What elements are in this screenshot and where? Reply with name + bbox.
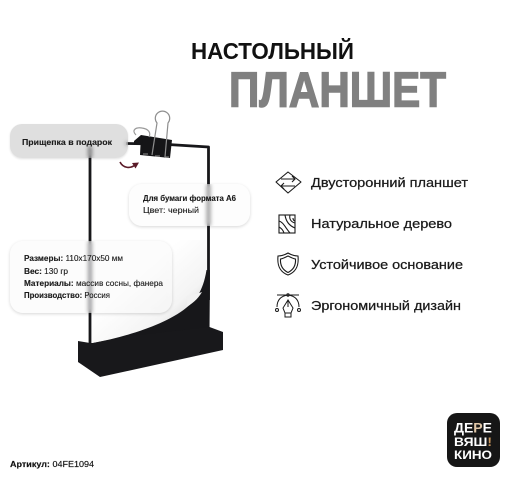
title: настольный: НАСТОЛЬНЫЙ	[191, 37, 354, 64]
panel: paper format: Для бумаги формата А6	[143, 194, 237, 203]
panel: specifications	[10, 241, 172, 313]
article number: Артикул: 04FE1094	[10, 459, 94, 469]
title: планшет: ПЛАНШЕТ	[229, 62, 446, 118]
feature text: устойчивое основание: Устойчивое основание	[311, 257, 463, 272]
panel: specifications: Размеры: 110x170x50 мм	[24, 254, 123, 263]
paper corner	[185, 292, 202, 308]
panel: clip gift: Прищепка в подарок	[22, 138, 113, 147]
logo: КИНО	[454, 450, 492, 462]
logo: ДЕРЕ	[454, 420, 492, 436]
arrow	[120, 162, 139, 168]
panel: specifications: Вес: 130 гр	[24, 267, 69, 276]
panel: paper format: Цвет: черный	[143, 206, 199, 215]
feature text: натуральное дерево: Натуральное дерево	[311, 216, 452, 231]
logo: ВЯШ !	[454, 437, 492, 449]
panel: specifications: Производство: Россия	[24, 291, 110, 300]
panel: paper format	[129, 184, 250, 226]
paper	[92, 240, 207, 343]
frame	[90, 144, 208, 344]
feature text: двусторонний планшет: Двусторонний планшет	[311, 175, 468, 190]
binder clip	[134, 111, 172, 158]
paper curl	[93, 270, 210, 348]
wooden base	[78, 327, 223, 377]
panel: specifications: Материалы: массив сосны, фанера	[24, 279, 164, 288]
feature text: эргономичный дизайн: Эргономичный дизайн	[311, 298, 461, 313]
panel: clip gift	[10, 124, 128, 158]
